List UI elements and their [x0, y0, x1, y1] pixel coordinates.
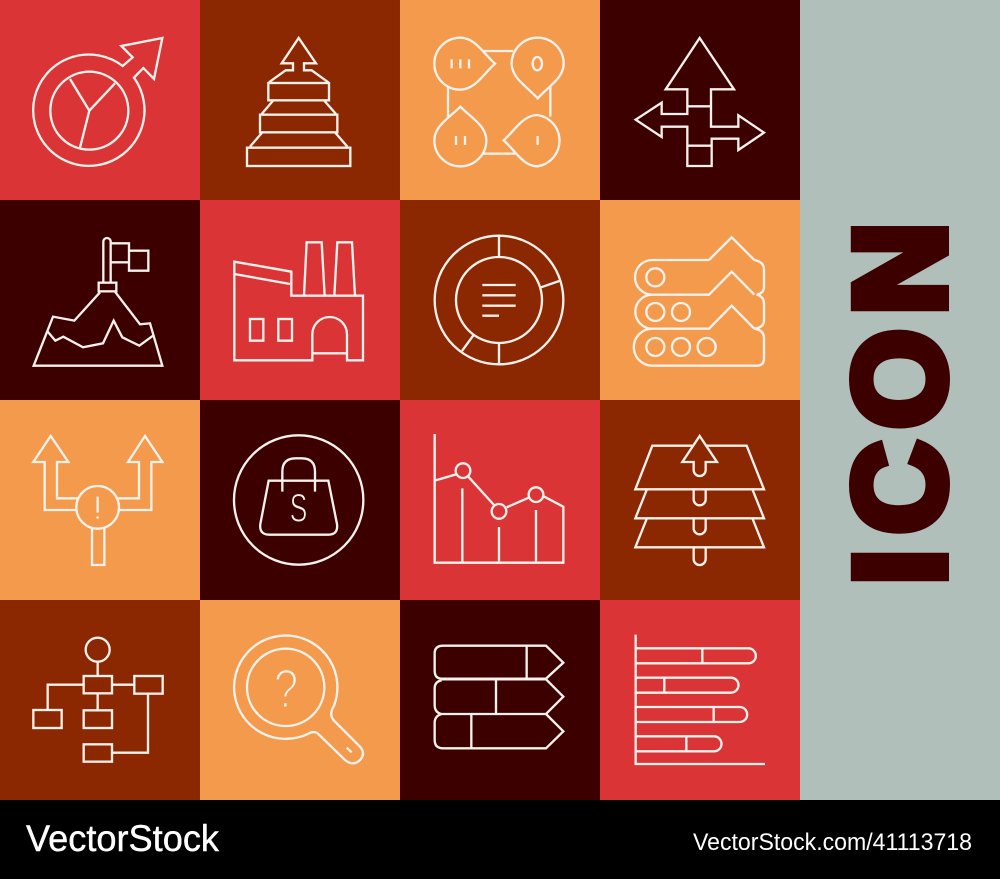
tile: arrow shaped stacked bars: [400, 600, 600, 800]
brand name: VectorStock: [26, 818, 219, 859]
tile: three way arrows: [600, 0, 800, 200]
tile: factory: [200, 200, 400, 400]
tile: layers with up arrow: [600, 400, 800, 600]
tile: server stack with arrows: [600, 200, 800, 400]
image url: VectorStock.com/41113718: [693, 829, 972, 856]
icon glyph: question mark: ?: [274, 658, 298, 720]
tile: mountain with flag: [0, 200, 200, 400]
tile: split arrows with warning: [0, 400, 200, 600]
panel: side title: [800, 0, 1000, 800]
tile: flowchart: [0, 600, 200, 800]
tile: four drop pins: [400, 0, 600, 200]
tile: line chart with points: [400, 400, 600, 600]
icon glyph: S: S: [290, 486, 307, 531]
panel: icon grid: [0, 0, 800, 800]
footer bar: [0, 800, 1000, 879]
tile: shopping bag in circle: [200, 400, 400, 600]
tile: male symbol pie chart: [0, 0, 200, 200]
tile: donut chart with text lines: [400, 200, 600, 400]
tile: horizontal bar chart: [600, 600, 800, 800]
tile: magnifier with question mark: [200, 600, 400, 800]
tile: pyramid with arrow: [200, 0, 400, 200]
title: ICON: [829, 222, 972, 585]
